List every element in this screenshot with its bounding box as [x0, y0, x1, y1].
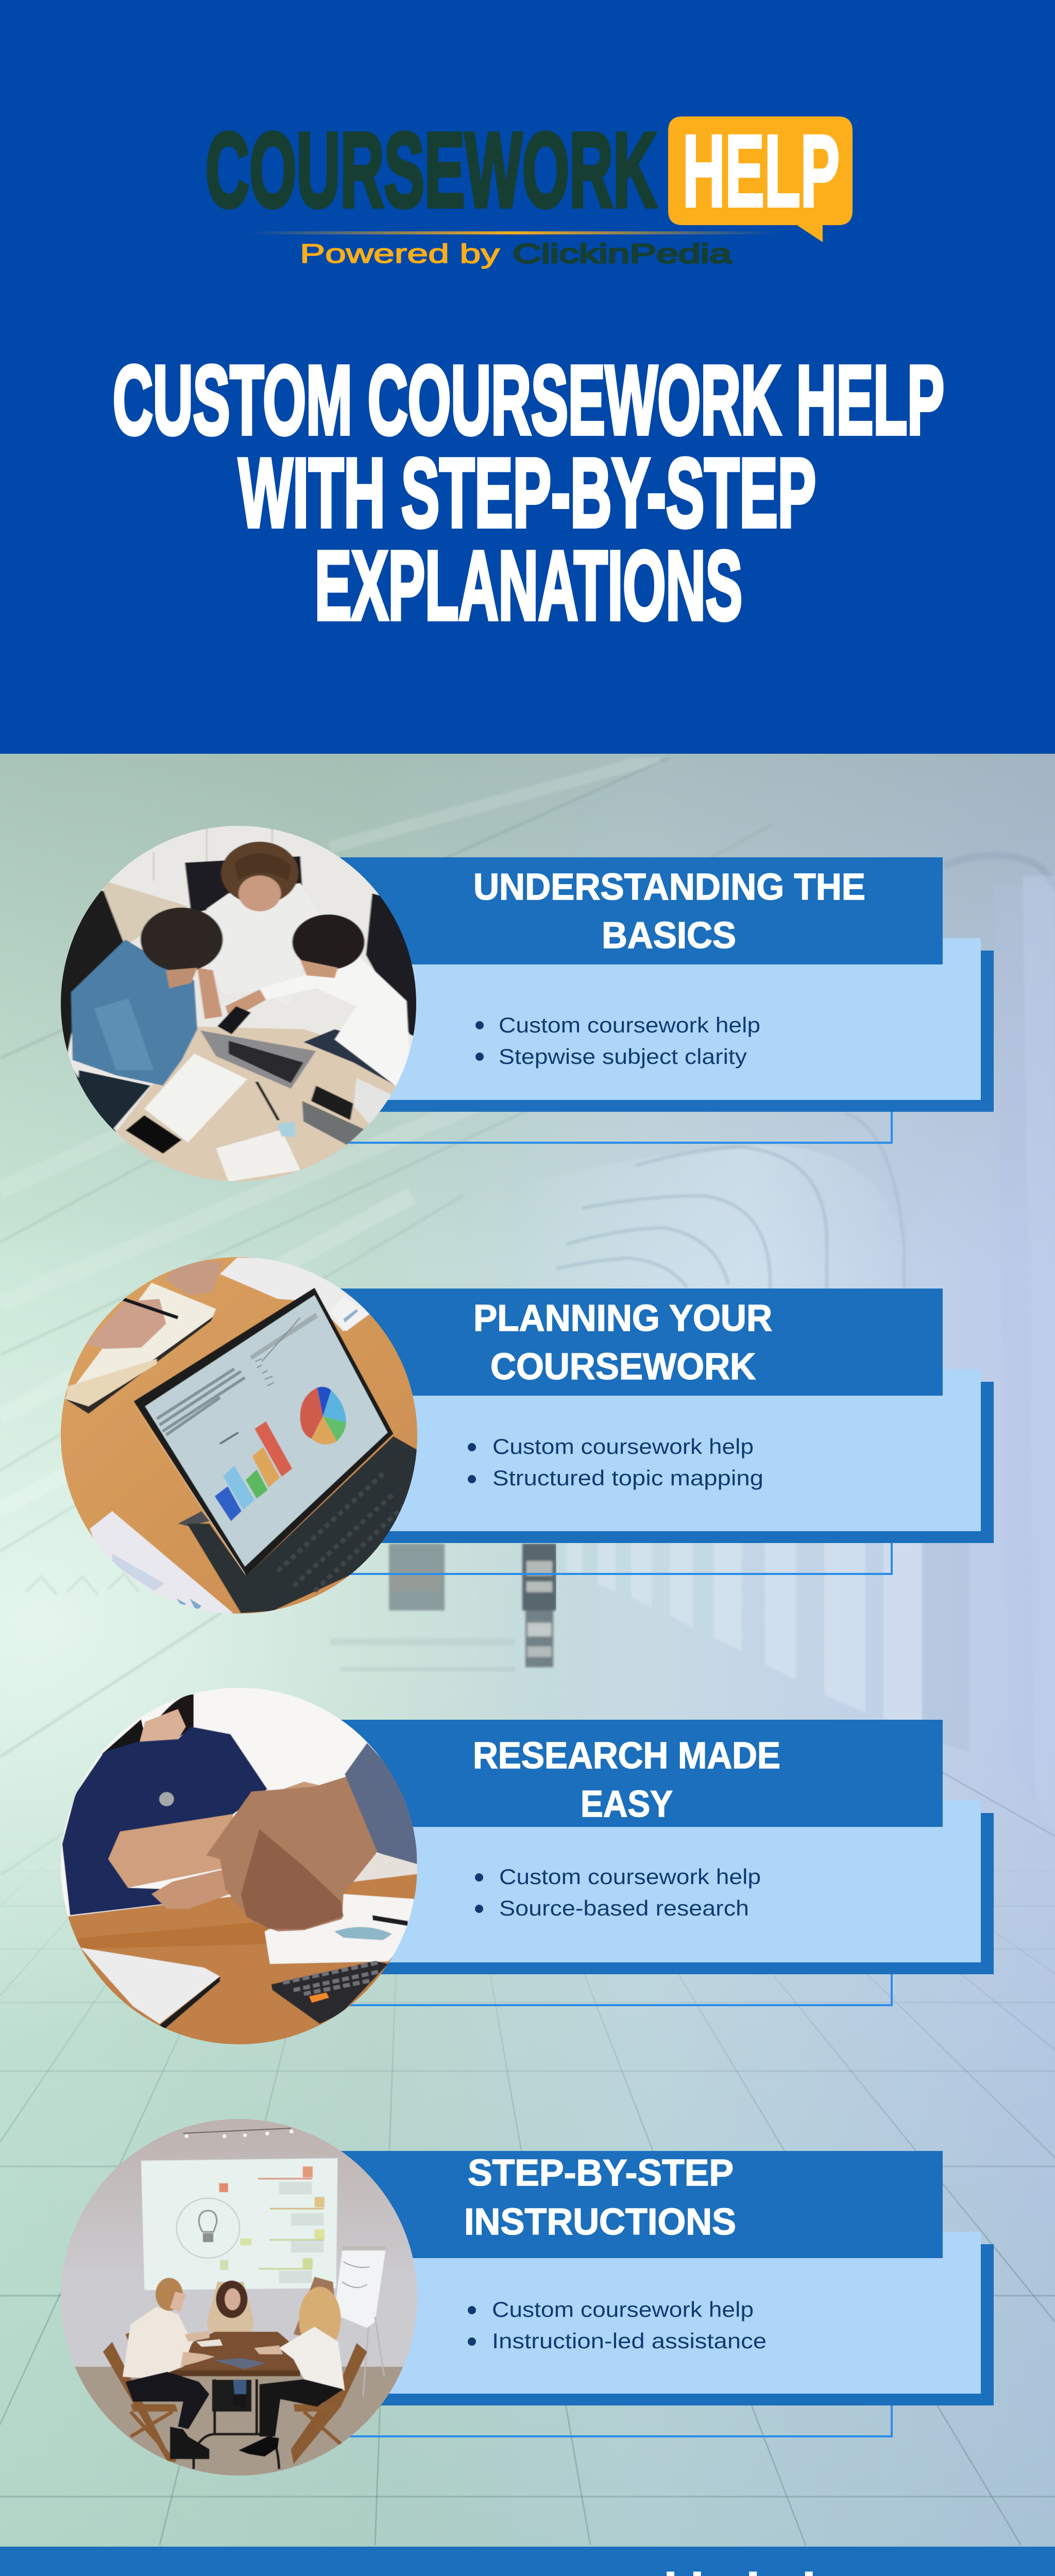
panel shadow	[361, 951, 994, 1112]
logo word: HELP: HELP	[683, 114, 840, 228]
photo: business handshake	[41, 1669, 453, 2061]
heading bar	[340, 857, 943, 964]
panel shadow	[361, 2244, 994, 2405]
top banner	[0, 0, 1055, 754]
item 2: Instruction-led assistance	[492, 2329, 767, 2353]
background: corridor photo with gradient	[0, 754, 1055, 2547]
heading	[473, 1298, 772, 1387]
heading line 1: RESEARCH MADE	[473, 1735, 780, 1776]
heading line 2: EASY	[581, 1784, 673, 1825]
powered by: Powered by	[300, 239, 500, 269]
bullet dot 2	[475, 1053, 484, 1061]
heading bar	[340, 2151, 943, 2258]
photo: three colleagues at a laptop	[41, 819, 441, 1188]
footer bar	[0, 2547, 1055, 2576]
heading bar	[340, 1720, 943, 1827]
dark objects in the corridor	[330, 1544, 556, 1672]
panel shadow	[361, 1382, 994, 1543]
step 1: understanding the basics	[41, 819, 994, 1188]
logo word: COURSEWORK: COURSEWORK	[206, 111, 657, 229]
bullet dot 1	[475, 1021, 484, 1029]
heading	[473, 1735, 780, 1825]
heading line 1: UNDERSTANDING THE	[473, 867, 865, 908]
bullet dot 1	[475, 1873, 483, 1882]
floor tile lines	[0, 1752, 1055, 2545]
item 2: Structured topic mapping	[492, 1466, 763, 1490]
bullet list	[468, 2297, 767, 2353]
panel	[361, 2232, 981, 2394]
arches	[515, 1145, 904, 1391]
heading	[473, 867, 865, 956]
heading line 2: BASICS	[602, 915, 736, 956]
panel	[361, 1801, 981, 1962]
right floor edge	[895, 1745, 1055, 1836]
item 1: Custom coursework help	[492, 2297, 754, 2321]
panel	[361, 938, 981, 1100]
heading line 2: COURSEWORK	[490, 1346, 756, 1387]
heading	[464, 2153, 736, 2243]
bullet list	[475, 1013, 760, 1069]
bullet dot 2	[468, 1475, 476, 1483]
bullet list	[468, 1434, 763, 1490]
connector outline	[330, 1108, 892, 1143]
title	[113, 346, 944, 640]
heading line 1: STEP-BY-STEP	[468, 2153, 734, 2194]
step 2: planning your coursework	[41, 1236, 994, 1628]
connector outline	[330, 1539, 892, 1574]
bullet dot 2	[468, 2337, 476, 2346]
bullet dot 1	[468, 2306, 476, 2314]
step 3: research made easy	[41, 1669, 994, 2061]
icon: speech bubble	[668, 116, 853, 242]
corridor fins	[567, 1540, 922, 1731]
bullet dot 1	[468, 1443, 476, 1451]
heading line 2: INSTRUCTIONS	[464, 2201, 736, 2243]
gold rule	[247, 231, 778, 234]
right column	[994, 886, 1055, 1834]
photo: tablet with charts on a desk	[41, 1236, 453, 1628]
ceiling bands	[0, 757, 773, 1875]
item 1: Custom coursework help	[499, 1013, 760, 1037]
bullet dot 2	[475, 1905, 483, 1913]
logo	[206, 111, 853, 269]
connector outline	[330, 2401, 892, 2436]
ClickinPedia: ClickinPedia	[513, 239, 731, 269]
item 1: Custom coursework help	[499, 1865, 761, 1889]
heading line 1: PLANNING YOUR	[473, 1298, 772, 1339]
item 2: Source-based research	[499, 1896, 749, 1920]
item 1: Custom coursework help	[492, 1434, 754, 1459]
panel shadow	[361, 1813, 994, 1974]
bullet list	[475, 1865, 761, 1920]
connector outline	[330, 1970, 892, 2005]
step 4: step-by-step instructions	[41, 2102, 994, 2494]
photo: team meeting in front of projection	[41, 2102, 453, 2494]
panel	[361, 1369, 981, 1531]
tagline	[300, 239, 731, 269]
item 2: Stepwise subject clarity	[499, 1044, 747, 1069]
heading bar	[340, 1289, 943, 1396]
title line 3: EXPLANATIONS	[315, 531, 742, 640]
